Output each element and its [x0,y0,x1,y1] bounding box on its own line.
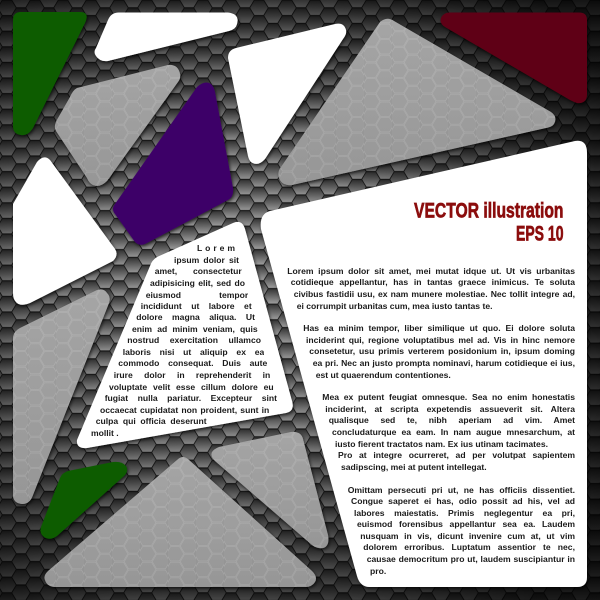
text block: center panel: occaecat cupidatat non proident, sunt in [100,404,269,414]
panel: purple [113,83,233,245]
text block: main panel: nusquam in vis, dicunt invenire cum at, ut vim [360,531,575,541]
text block: center panel: amet, consectetur [155,266,242,276]
text block: main panel: Omittam persecuti pri ut, ne has officiis dissentiet. [348,485,575,495]
text block: main panel: est ut quaerendum contentiones. [316,370,451,380]
text block: main panel: Mea ex putent feugiat omnesque. Sea no enim honestatis [322,392,575,402]
panel: white center [77,222,293,448]
text block: main panel: Has ea minim tempor, liber similique ut quo. Ei dolore soluta [303,323,575,333]
text block: center panel: mollit . [91,428,119,438]
text block: main panel: inciderint qui, regione voluptatibus mel ad. Vis in hinc nemore [306,335,575,345]
panel: white main [261,141,587,587]
text block: main panel: ea pri. Nec an justo prompta nominavi, harum cotidieque ei ius, [313,358,575,368]
text block: main panel: labores maiestatis. Primis neglegentur ea pri, [354,508,575,518]
text block: main panel: causae democritum pro ut, laudem suscipiantur in [367,554,575,564]
text block: main panel: Lorem ipsum dolor sit amet, mei mutat idque ut. Ut vis urbanitas [287,266,575,276]
text block: center panel: dolore magna aliqua. Ut [136,312,255,322]
text block: main panel: consetetur, usu primis verterem posidonium in, ipsum doming [309,346,575,356]
text block: center panel: incididunt ut labore et [141,301,252,311]
text block: main panel: iusto fierent tractatos nam. Ex ius utinam tacimates. [335,439,548,449]
text block: center panel: ipsum dolor sit [174,255,239,265]
text block: main panel: Congue saperet ei has, odio possit ad his, vel ad [351,496,575,506]
panel: large gray triangle [278,19,555,185]
panel: gray middle [55,65,180,186]
heading: vector illustration: EPS 10 [516,222,564,246]
panel: gray lower right [211,432,328,548]
panel: green bottom [40,462,127,539]
panel: gray bottom triangle [44,457,316,587]
text block: center panel: adipisicing elit, sed do [150,278,245,288]
text block: main panel: Pro at integre ocurreret, ad per volutpat sapientem [338,450,575,460]
panel: white upper right [228,24,346,164]
text block: center panel: culpa qui officia deserunt [96,416,207,426]
panel: white left [13,157,117,305]
panel: green top left [13,12,87,135]
text block: main panel: civibus fastidii usu, ex nam munere molestiae. Nec tollit integre ad, [294,289,575,299]
heading: vector illustration [414,200,564,246]
text block: center panel: voluptate velit esse cillum dolore eu [109,382,274,392]
text block: main panel: dolorem erroribus. Luptatum assentior te nec, [363,542,575,552]
text block: center panel: enim ad minim veniam, quis [132,324,258,334]
text block: main panel: ei corrumpit urbanitas cum, mea iusto tantas te. [297,301,492,311]
text block: main panel: cotidieque appellantur, has in tantas graece inimicus. Te soluta [291,277,575,287]
text block: main panel: sadipscing, mei at putent intellegat. [341,462,487,472]
text block: center panel: L o r e m [197,243,235,253]
text block: main panel: concludaturque ea eam. In nam augue mnesarchum, at [332,427,575,437]
text block: center panel: commodo consequat. Duis aute [118,358,267,368]
text block: main panel: qualisque sed te, nibh aperiam ad vim. Amet [329,415,575,425]
text block: center panel: nostrud exercitation ullamco [127,335,261,345]
text block: main panel: euismod forensibus appellantur sea ea. Laudem [357,519,575,529]
text block: center panel: irure dolor in reprehenderit in [114,370,270,380]
text block: center panel: fugiat nulla pariatur. Excepteur sint [105,393,277,403]
text block: main panel: pro. [370,566,386,576]
panel: white top [94,12,238,61]
text block: center panel: laboris nisi ut aliquip ex ea [123,347,264,357]
text block: center panel: eiusmod tempor [146,290,248,300]
panel: maroon [440,12,587,103]
panel: gray left [13,289,110,504]
text block: main panel: inciderint, at scripta expetendis assueverit sit. Altera [325,404,575,414]
